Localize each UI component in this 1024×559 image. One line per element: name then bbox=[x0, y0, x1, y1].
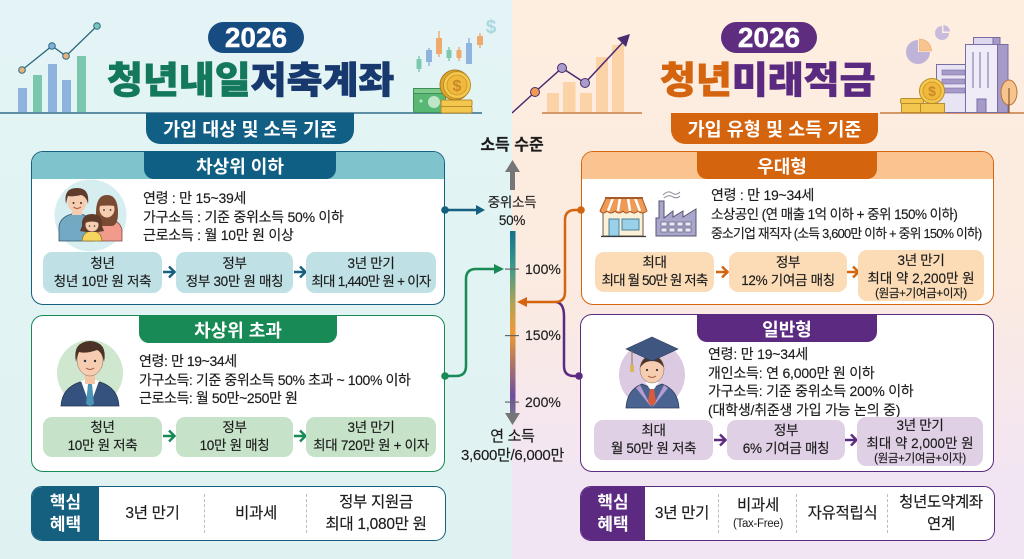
year badge: right bbox=[721, 22, 817, 53]
annual income label: 3,600만/6,000만 bbox=[461, 447, 564, 464]
step: government contribution bbox=[729, 252, 847, 292]
step: maturity: 3년 만기 bbox=[896, 418, 944, 433]
title: left: 청년내일저축계좌 bbox=[107, 60, 394, 101]
axis heading: 소득 수준 bbox=[480, 137, 544, 154]
benefit: term: 3년 만기 bbox=[125, 504, 180, 522]
icon: pies, buildings, coins and tree bbox=[880, 25, 1024, 114]
step: max saving: 최대 bbox=[642, 255, 667, 270]
panel: general type bbox=[580, 314, 994, 472]
eligibility text bbox=[711, 187, 982, 241]
icon: candles and coins bbox=[413, 17, 497, 114]
benefits bar: left bbox=[31, 486, 446, 541]
year badge: left bbox=[208, 22, 304, 53]
arrow bbox=[294, 430, 306, 442]
step: youth saving: 청년 10만 원 저축 bbox=[54, 274, 151, 288]
step: maturity bbox=[306, 417, 436, 457]
step: maturity: (원금+기여금+이자) bbox=[875, 288, 967, 300]
background: right peach to lavender half bbox=[512, 0, 1024, 559]
eligibility text: 가구소득 : 기준 중위소득 50% 이하 bbox=[143, 208, 344, 224]
arrow: income axis down bbox=[505, 413, 520, 425]
step: youth saving: 청년 bbox=[90, 256, 115, 270]
step: youth saving bbox=[43, 417, 162, 457]
step: maturity bbox=[858, 250, 984, 301]
tab heading bbox=[697, 314, 877, 342]
step: government match: 정부 30만 원 매칭 bbox=[186, 274, 283, 288]
median income label bbox=[488, 195, 536, 228]
subheading: left: 가입 대상 및 소득 기준 bbox=[163, 118, 337, 140]
arrow bbox=[847, 266, 858, 278]
eligibility text: (대학생/취준생 가입 가능 논의 중) bbox=[708, 402, 900, 418]
eligibility text: 연령: 만 19~34세 bbox=[139, 353, 237, 369]
benefit: tax free bbox=[733, 497, 783, 530]
connector: blue to median 50 bbox=[441, 205, 485, 215]
tick label 100 percent: 100% bbox=[525, 261, 561, 277]
annual income label: 연 소득 bbox=[490, 428, 535, 445]
panel: preferential type bbox=[581, 151, 994, 305]
title: right: 청년미래적금 bbox=[660, 60, 876, 101]
arrow bbox=[294, 266, 306, 278]
tick label 150 percent: 150% bbox=[525, 327, 561, 343]
tab heading: 일반형 bbox=[762, 320, 812, 340]
step: youth saving bbox=[43, 252, 162, 293]
step: government contribution: 6% 기여금 매칭 bbox=[743, 441, 829, 456]
subheading: left bbox=[146, 113, 354, 144]
eligibility text: 중소기업 재직자 (소득 3,600만 이하 + 중위 150% 이하) bbox=[711, 226, 982, 241]
tab heading bbox=[144, 151, 336, 179]
step: maturity: 최대 약 2,000만 원 bbox=[866, 436, 974, 450]
step: maturity: 3년 만기 bbox=[347, 420, 395, 435]
benefit: tax free: (Tax-Free) bbox=[733, 518, 783, 530]
tab heading bbox=[697, 151, 877, 179]
connector: orange to 150 percent bbox=[517, 206, 585, 307]
benefits bar: right bbox=[580, 486, 995, 541]
step: government match: 정부 bbox=[222, 256, 247, 270]
step: max saving: 최대 bbox=[641, 423, 666, 438]
background: left teal half bbox=[0, 0, 512, 559]
icon: candles and coins: $ bbox=[486, 17, 497, 38]
eligibility text: 연령 : 만 19~34세 bbox=[711, 187, 814, 203]
step: maturity: 최대 1,440만 원 + 이자 bbox=[311, 274, 431, 288]
gradient income bar bbox=[510, 231, 516, 414]
step: government contribution bbox=[727, 420, 845, 460]
icon: left growth chart bbox=[0, 22, 482, 114]
benefits label: 혜택 bbox=[50, 514, 81, 534]
subheading: right: 가입 유형 및 소득 기준 bbox=[688, 118, 861, 140]
arrow bbox=[163, 266, 176, 278]
eligibility text: 소상공인 (연 매출 1억 이하 + 중위 150% 이하) bbox=[711, 207, 957, 222]
benefits label: 혜택 bbox=[597, 514, 629, 534]
icon: pies, buildings, coins and tree: $ bbox=[928, 83, 936, 99]
connector: green to 100 percent bbox=[441, 264, 504, 380]
icon: young man in suit bbox=[57, 340, 123, 406]
arrow bbox=[845, 434, 857, 446]
tab heading: 우대형 bbox=[757, 156, 807, 176]
icon: family bbox=[54, 180, 126, 252]
year badge: right: 2026 bbox=[738, 22, 800, 52]
eligibility text: 가구소득: 기준 중위소득 50% 초과 ~ 100% 이하 bbox=[139, 372, 410, 388]
step: government match bbox=[176, 417, 293, 457]
step: youth saving: 청년 bbox=[90, 420, 115, 435]
step: government match: 10만 원 매칭 bbox=[200, 438, 269, 453]
year badge: left: 2026 bbox=[225, 22, 287, 52]
benefit: government support bbox=[325, 494, 427, 532]
step: maturity bbox=[306, 252, 436, 293]
tab heading bbox=[139, 315, 337, 343]
icon: candles and coins: $ bbox=[453, 78, 462, 95]
arrow: income axis up bbox=[505, 160, 520, 190]
step: max saving: 월 50만 원 저축 bbox=[611, 441, 696, 456]
step: government match bbox=[176, 252, 293, 293]
icon: store and factory bbox=[600, 191, 696, 238]
benefits label: 핵심 bbox=[50, 492, 81, 512]
arrow bbox=[714, 434, 727, 446]
arrow bbox=[716, 266, 729, 278]
benefit: tax free: 비과세 bbox=[737, 497, 779, 514]
benefit: term: 3년 만기 bbox=[655, 504, 709, 522]
step: maturity: 최대 약 2,200만 원 bbox=[867, 270, 975, 286]
icon: graduate bbox=[619, 336, 685, 408]
panel: below second-tier income bbox=[31, 151, 445, 305]
benefit: tax free: 비과세 bbox=[235, 504, 277, 522]
eligibility text: 연령 : 만 15~39세 bbox=[143, 190, 246, 206]
eligibility text bbox=[708, 346, 914, 418]
step: maturity: 3년 만기 bbox=[347, 256, 395, 270]
benefit: flexible saving: 자유적립식 bbox=[808, 504, 877, 522]
step: government contribution: 12% 기여금 매칭 bbox=[741, 273, 835, 288]
benefit: linked account: 청년도약계좌 bbox=[899, 494, 983, 510]
annual income label bbox=[461, 428, 564, 464]
step: government contribution: 정부 bbox=[774, 423, 798, 438]
benefit: linked account: 연계 bbox=[927, 516, 955, 532]
income scale axis with connectors bbox=[441, 160, 585, 425]
connector: purple to 150 percent bbox=[556, 302, 583, 380]
benefit: linked account bbox=[899, 494, 983, 532]
benefit: government support: 최대 1,080만 원 bbox=[325, 516, 427, 532]
step: max saving bbox=[595, 252, 714, 292]
step: maturity bbox=[857, 417, 983, 466]
step: maturity: (원금+기여금+이자) bbox=[874, 453, 966, 465]
benefits label bbox=[581, 487, 645, 540]
step: max saving bbox=[594, 420, 713, 460]
panel: above second-tier income bbox=[31, 315, 445, 472]
tick label 200 percent: 200% bbox=[525, 394, 561, 410]
eligibility text: 근로소득: 월 50만~250만 원 bbox=[139, 390, 298, 406]
median income label: 50% bbox=[499, 213, 525, 228]
step: youth saving: 10만 원 저축 bbox=[68, 438, 137, 453]
tab heading: 차상위 이하 bbox=[196, 156, 284, 176]
subheading: right bbox=[671, 113, 878, 144]
eligibility text bbox=[139, 353, 411, 406]
eligibility text: 가구소득: 기준 중위소득 200% 이하 bbox=[708, 383, 914, 399]
icon: right growth chart bbox=[512, 34, 642, 114]
step: government match: 정부 bbox=[222, 420, 247, 435]
step: max saving: 최대 월 50만 원 저축 bbox=[602, 273, 707, 288]
benefits label: 핵심 bbox=[597, 492, 629, 512]
eligibility text: 개인소득: 연 6,000만 원 이하 bbox=[708, 364, 875, 380]
benefits label bbox=[32, 487, 99, 540]
step: government contribution: 정부 bbox=[776, 255, 800, 270]
step: maturity: 최대 720만 원 + 이자 bbox=[313, 438, 429, 453]
benefit: government support: 정부 지원금 bbox=[339, 494, 413, 510]
step: maturity: 3년 만기 bbox=[897, 253, 945, 268]
tab heading: 차상위 초과 bbox=[194, 320, 282, 340]
eligibility text: 연령: 만 19~34세 bbox=[708, 346, 808, 362]
arrow bbox=[163, 430, 176, 442]
eligibility text bbox=[143, 190, 344, 243]
eligibility text: 근로소득 : 월 10만 원 이상 bbox=[143, 227, 294, 243]
median income label: 중위소득 bbox=[488, 195, 536, 210]
